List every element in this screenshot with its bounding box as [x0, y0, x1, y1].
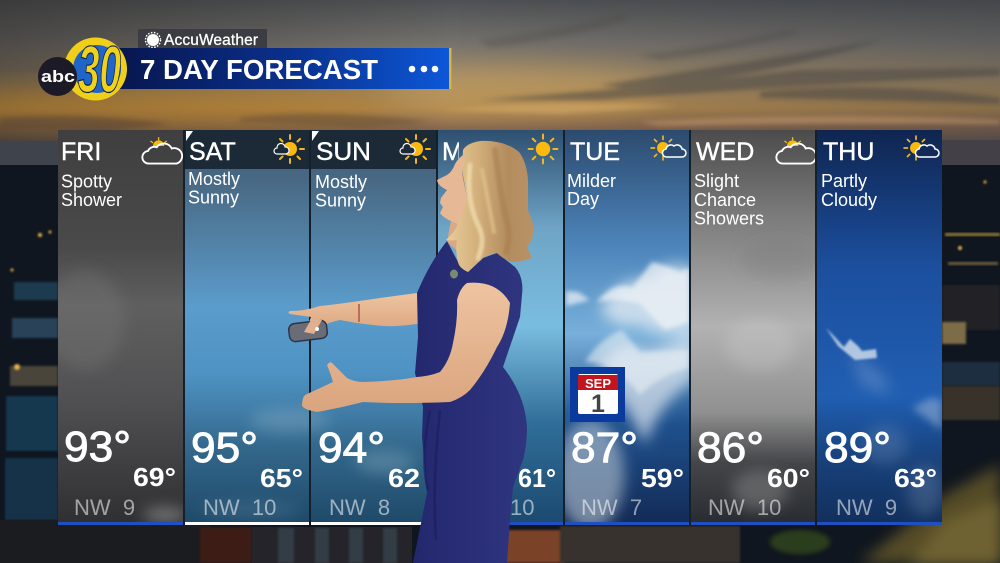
wind: Tuesday: NW 7 — [581, 495, 642, 520]
condition text: Wednesday: Chance — [694, 190, 756, 210]
condition text: Tuesday: Day — [567, 189, 599, 209]
icon: sun behind cloud Wednesday — [776, 137, 816, 164]
panel: Thursday — [817, 130, 943, 525]
low temperature: Thursday: 63° — [894, 463, 937, 493]
corner mark: Saturday — [186, 131, 193, 141]
dress drape folds — [424, 410, 440, 540]
day label: WED: WED — [696, 138, 754, 166]
far arm with remote — [288, 293, 422, 342]
panel: Monday — [438, 130, 563, 525]
icon: sunny — [529, 135, 557, 163]
bottom bar — [58, 522, 183, 525]
icon: sun behind cloud — [142, 137, 182, 164]
condition text: Sunday: Mostly — [315, 172, 367, 192]
bottom bar: Wednesday — [691, 522, 815, 525]
bottom bar: Tuesday — [565, 522, 689, 525]
bottom bar: Monday — [438, 522, 563, 525]
panel: Tuesday — [565, 130, 689, 525]
high temperature: Tuesday: 87° — [571, 424, 638, 472]
condition text: Wednesday: Slight — [694, 171, 739, 191]
calendar: Sep 1 — [570, 367, 625, 422]
condition text: Shower — [61, 190, 122, 210]
calendar: Sep 1: SEP — [585, 376, 611, 391]
condition text: Wednesday: Showers — [694, 208, 764, 228]
dress — [413, 241, 527, 563]
near arm and hand — [302, 283, 510, 412]
station logo — [38, 32, 127, 106]
day label: MON: MON — [442, 138, 500, 166]
bottom bar: Saturday — [185, 522, 309, 525]
low temperature: Sunday: 62 — [388, 463, 420, 493]
wind: Sunday: NW 8 — [329, 495, 390, 520]
icon: mostly sunny Saturday — [274, 135, 304, 163]
bottom bar: Thursday — [817, 522, 942, 525]
panel: Wednesday — [691, 130, 820, 525]
day label: THU: THU — [823, 138, 874, 166]
icon: AccuWeather sun — [146, 32, 160, 48]
AccuWeather tab: AccuWeather — [164, 32, 258, 49]
high temperature: 93° — [64, 423, 131, 471]
wind: NW 9 — [74, 495, 135, 520]
pin — [450, 270, 458, 278]
bottom bar: Sunday — [311, 522, 436, 525]
station logo: abc — [41, 67, 75, 86]
day label: TUE: TUE — [570, 138, 620, 166]
condition text: Saturday: Mostly — [188, 169, 240, 189]
panel: Friday — [58, 130, 183, 525]
condition text: Sunday: Sunny — [315, 190, 366, 210]
low temperature: Wednesday: 60° — [767, 463, 810, 493]
condition text: Saturday: Sunny — [188, 188, 239, 208]
condition text: Spotty — [61, 172, 112, 192]
presenter — [288, 141, 534, 563]
high temperature: Thursday: 89° — [824, 424, 891, 472]
background: sunset sky — [0, 0, 1000, 168]
icon: sun and cloud Tuesday — [651, 136, 686, 160]
low temperature: Monday: 61° — [518, 463, 556, 493]
icon: sun and cloud Thursday — [904, 136, 939, 160]
low temperature: Saturday: 65° — [260, 463, 303, 493]
hair — [446, 141, 534, 272]
wind: Saturday: NW 10 — [203, 495, 276, 520]
condition text: Tuesday: Milder — [567, 171, 616, 191]
day label: FRI: FRI — [61, 138, 101, 166]
station logo: 30 — [78, 32, 121, 106]
wind: Monday: 10 — [510, 495, 534, 520]
face — [437, 153, 467, 224]
header band: Saturday — [185, 130, 309, 169]
title banner — [118, 48, 452, 89]
condition text: Thursday: Partly — [821, 171, 867, 191]
wind: Thursday: NW 9 — [836, 495, 897, 520]
panel gaps — [183, 130, 817, 522]
AccuWeather tab — [138, 29, 267, 49]
title: 7 DAY FORECAST — [140, 54, 378, 85]
high temperature: Wednesday: 86° — [697, 424, 764, 472]
icon: mostly sunny Sunday — [400, 135, 430, 163]
header band: Sunday — [311, 130, 436, 169]
calendar: Sep 1: 1 — [591, 390, 605, 418]
high temperature: Sunday: 94° — [318, 424, 385, 472]
panel: Saturday and Sunday sky — [185, 130, 436, 525]
low temperature: 69° — [133, 462, 176, 492]
condition text: Thursday: Cloudy — [821, 190, 877, 210]
day label: SAT: SAT — [189, 138, 236, 166]
corner mark: Sunday — [312, 131, 319, 141]
background: city at dusk — [0, 165, 1000, 563]
neck — [447, 215, 480, 262]
day label: SUN: SUN — [316, 138, 371, 166]
wind: Wednesday: NW 10 — [708, 495, 781, 520]
three dots — [409, 66, 438, 72]
low temperature: Tuesday: 59° — [641, 463, 684, 493]
high temperature: Saturday: 95° — [191, 424, 258, 472]
